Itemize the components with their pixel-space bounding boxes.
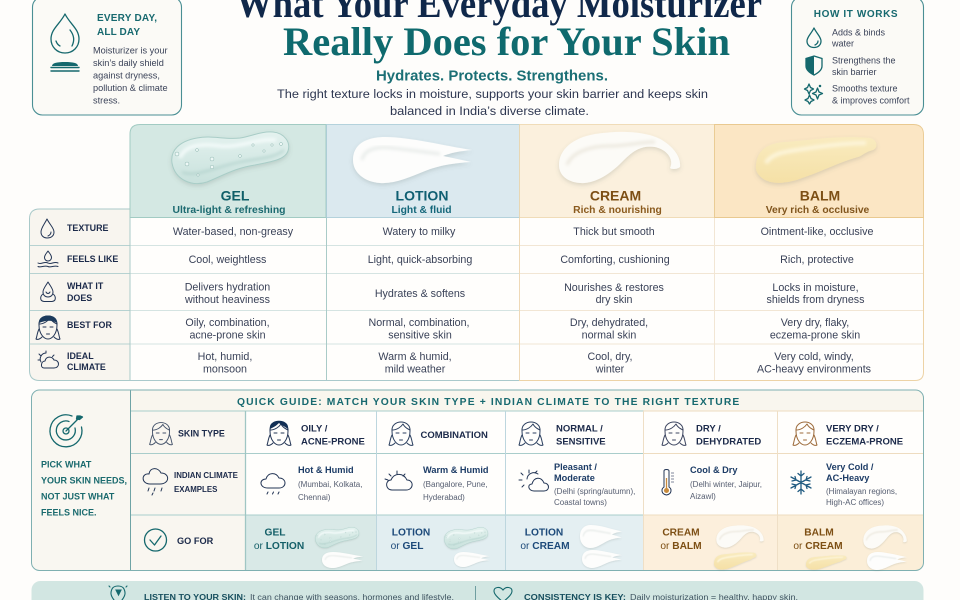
label: oily: ACNE-PRONE (301, 436, 365, 448)
text: pleasant: (Delhi (spring/autumn), (554, 487, 635, 496)
text: warm and humid (423, 465, 489, 502)
text: warm and humid: Warm & Humid (423, 465, 489, 475)
icon: feels like (38, 251, 58, 267)
icon: best for face (36, 316, 60, 339)
row values: gel: acne-prone skin (189, 330, 266, 342)
row values: lotion: Normal, combination, (369, 317, 470, 329)
callout: pick what your skin needs: PICK WHAT (41, 460, 92, 470)
icon: what it does (41, 282, 55, 302)
row values: balm: Locks in moisture, (772, 282, 859, 294)
row: skin type (150, 421, 903, 448)
text: very cold (826, 462, 897, 507)
text: very cold: AC-Heavy (826, 473, 870, 483)
label: very dry: VERY DRY / (826, 424, 879, 434)
icon: heart (494, 587, 512, 600)
icon: target (50, 415, 82, 447)
row values: balm: shields from dryness (766, 294, 865, 306)
label: go for: GO FOR (177, 536, 214, 546)
recommendation: cream or balm: or BALM (660, 541, 702, 552)
text: hot and humid: Hot & Humid (298, 465, 354, 475)
text: pleasant: Moderate (554, 473, 595, 483)
label: indian climate examples: INDIAN CLIMATE (174, 471, 238, 480)
row values: cream (560, 226, 670, 376)
text: cool and dry: Cool & Dry (690, 465, 738, 475)
recommendation: balm or cream: BALM (804, 528, 834, 538)
text: shield description: skin’s daily shield (93, 58, 164, 68)
label: normal: NORMAL / (556, 424, 603, 434)
text: shield description: pollution & climate (93, 83, 168, 93)
label: very dry: ECZEMA-PRONE (826, 436, 903, 448)
text: very cold: (Himalayan regions, (826, 487, 897, 496)
icon: light bulb (109, 586, 127, 600)
icon: very dry face (793, 422, 817, 445)
icon: normal face (519, 422, 543, 445)
row values: balm: Very dry, flaky, (781, 317, 849, 329)
panel: footer tips (32, 581, 924, 600)
row values: balm (757, 226, 873, 376)
image: lotion swatch (353, 137, 472, 183)
subtitle: Hydrates. Protects. Strengthens. (376, 68, 608, 84)
label: gel: GEL (221, 188, 250, 204)
icon: combination face (389, 422, 413, 445)
column body background (130, 218, 924, 380)
recommendation: gel or lotion: or LOTION (254, 541, 304, 552)
icon: pleasant sun cloud (519, 470, 548, 491)
row values: cream: dry skin (596, 294, 632, 306)
callout: pick what your skin needs: YOUR SKIN NEEDS, (41, 476, 127, 486)
recommendation: gel or lotion (254, 527, 363, 568)
label: feels like: FEELS LIKE (67, 254, 118, 264)
row values: gel: Cool, weightless (189, 254, 266, 266)
label: combination: COMBINATION (420, 430, 488, 441)
row values: cream: Thick but smooth (573, 226, 655, 238)
row values: lotion: Light, quick-absorbing (368, 254, 472, 266)
heading: how it works: HOW IT WORKS (814, 9, 898, 20)
column: cream (520, 124, 714, 376)
label: dry: DEHYDRATED (696, 436, 761, 448)
text: very cold: High-AC offices) (826, 498, 884, 507)
text: cool and dry: (Delhi winter, Jaipur, (690, 480, 762, 489)
text: hot and humid (298, 465, 362, 502)
label: oily: OILY / (301, 424, 328, 434)
row values: lotion: Watery to milky (383, 226, 456, 238)
label: texture: TEXTURE (67, 223, 108, 233)
text: pleasant: Coastal towns) (554, 498, 607, 507)
recommendation: lotion or cream (520, 525, 622, 568)
text: consistency is key (524, 592, 798, 600)
text: shield description: Moisturizer is your (93, 46, 168, 56)
label: best for: BEST FOR (67, 320, 112, 330)
row: go for (144, 525, 907, 570)
text: very cold: Very Cold / (826, 462, 874, 472)
sublabel: lotion: Light & fluid (391, 205, 452, 216)
panel: how it works (792, 0, 924, 115)
panel: row labels (30, 209, 130, 380)
row values: cream: winter (595, 364, 625, 376)
icon: ideal climate (38, 351, 58, 368)
sublabel: gel: Ultra-light & refreshing (172, 205, 286, 216)
icon: drop (807, 28, 821, 48)
label: skin type: SKIN TYPE (178, 428, 225, 438)
sublabel: cream: Rich & nourishing (573, 205, 662, 216)
label: ideal climate: IDEAL (67, 351, 94, 361)
intro text: The right texture locks in moisture, supports your skin barrier and keeps skin (277, 87, 708, 101)
row values: balm: AC-heavy environments (757, 364, 871, 376)
text: smooths texture: & improves comfort (832, 96, 910, 106)
column: gel (130, 124, 326, 376)
recommendation: lotion or cream: or CREAM (520, 541, 570, 552)
heading: every day all day: EVERY DAY, (97, 13, 157, 24)
panel: every day, all day (32, 0, 182, 115)
label: cream: CREAM (590, 188, 641, 204)
intro text (277, 87, 708, 118)
row values: gel: Delivers hydration (185, 282, 270, 294)
icon: warm humid cloud (385, 471, 412, 490)
row dividers (130, 217, 924, 380)
row values: cream: Cool, dry, (588, 351, 632, 363)
row values: lotion: mild weather (385, 364, 446, 376)
text: pleasant: Pleasant / (554, 462, 597, 472)
text: shield description: stress. (93, 96, 120, 106)
recommendation: lotion or gel: LOTION (392, 528, 430, 538)
text: listen to your skin (144, 592, 454, 600)
divider (474, 586, 476, 600)
title (236, 0, 762, 64)
text: strengthens the skin barrier: Strengthens the (832, 56, 896, 66)
heading: quick guide: QUICK GUIDE: MATCH YOUR SKIN TYPE + INDIAN CLIMATE TO THE RIGHT TEXTURE (237, 397, 741, 408)
panel: texture comparison table (30, 124, 924, 380)
label: dry: DRY / (696, 424, 721, 434)
row values: gel: monsoon (203, 364, 247, 376)
icon: oily face (267, 421, 291, 445)
icon: snowflake (791, 471, 811, 494)
text: warm and humid: (Bangalore, Pune, (423, 480, 488, 489)
text: hot and humid: Chennai) (298, 493, 331, 502)
recommendation: lotion or cream: LOTION (525, 528, 563, 538)
text: cool and dry: Aizawl) (690, 492, 716, 501)
row values: cream: Nourishes & restores (564, 282, 664, 294)
row values: cream: normal skin (582, 330, 636, 342)
row values: balm: Ointment-like, occlusive (761, 226, 873, 238)
text: adds and binds water: Adds & binds (832, 28, 886, 38)
column: lotion (326, 124, 520, 376)
icon: rain cloud (143, 469, 168, 495)
callout: pick what your skin needs: FEELS NICE. (41, 508, 97, 518)
recommendation: balm or cream (793, 525, 907, 570)
row values: lotion: sensitive skin (388, 330, 452, 342)
icon: water drop on a base (51, 14, 79, 71)
recommendation: lotion or gel (391, 527, 490, 567)
icon: skin type face (150, 423, 172, 445)
row values: balm: Rich, protective (780, 254, 854, 266)
icon: check circle (144, 529, 166, 551)
label: what it does: WHAT IT (67, 281, 104, 291)
row: indian climate (143, 462, 897, 507)
image: gel swatch (172, 132, 289, 184)
text: pleasant (554, 462, 635, 507)
icon: thermometer (662, 470, 674, 495)
text: strengthens the skin barrier: skin barrier (832, 67, 877, 77)
row values: gel: Oily, combination, (185, 317, 270, 329)
recommendation: cream or balm: CREAM (662, 528, 700, 538)
row values: balm: Very cold, windy, (774, 351, 854, 363)
icon: hot humid cloud (261, 474, 285, 494)
label: what it does: DOES (67, 293, 92, 303)
icon: sparkles (804, 84, 822, 104)
row values: lotion: Warm & humid, (378, 351, 452, 363)
recommendation: balm or cream: or CREAM (793, 541, 843, 552)
label: balm: BALM (800, 188, 840, 204)
row values: gel: Hot, humid, (198, 351, 252, 363)
image: balm swatch (756, 137, 876, 183)
row values: cream: Dry, dehydrated, (570, 317, 648, 329)
text: cool and dry (690, 465, 762, 501)
sublabel: balm: Very rich & occlusive (766, 205, 870, 216)
row values: gel (173, 226, 294, 376)
recommendation: cream or balm (660, 525, 764, 570)
text: hot and humid: (Mumbai, Kolkata, (298, 480, 362, 489)
cell fills (32, 390, 924, 570)
row values: gel: without heaviness (184, 294, 270, 306)
text: adds and binds water: water (831, 38, 854, 48)
recommendation: lotion or gel: or GEL (391, 541, 423, 552)
icon: dry face (662, 422, 686, 445)
label: indian climate examples: EXAMPLES (174, 485, 217, 494)
panel: quick guide (32, 390, 924, 570)
grid lines (32, 390, 924, 570)
label: normal: SENSITIVE (556, 436, 606, 448)
text: smooths texture: Smooths texture (832, 84, 898, 94)
icon: shield (806, 56, 822, 75)
row values: lotion (368, 226, 472, 376)
row values: lotion: Hydrates & softens (375, 288, 465, 300)
recommendation: gel or lotion: GEL (265, 528, 285, 538)
row values: cream: Comforting, cushioning (560, 254, 670, 266)
image: cream swatch (559, 132, 680, 183)
row values: gel: Water-based, non-greasy (173, 226, 294, 238)
icon: texture drop (41, 219, 54, 238)
text: shield description: against dryness, (93, 70, 160, 80)
label: lotion: LOTION (396, 188, 448, 204)
callout: pick what your skin needs: NOT JUST WHAT (41, 492, 115, 502)
row values: balm: eczema-prone skin (770, 330, 860, 342)
text: warm and humid: Hyderabad) (423, 493, 465, 502)
column: balm (714, 124, 924, 376)
heading: every day all day: ALL DAY (97, 27, 140, 38)
intro text: balanced in India’s diverse climate. (390, 104, 589, 118)
title: Really Does for Your Skin (283, 19, 730, 64)
label: ideal climate: CLIMATE (67, 362, 106, 372)
